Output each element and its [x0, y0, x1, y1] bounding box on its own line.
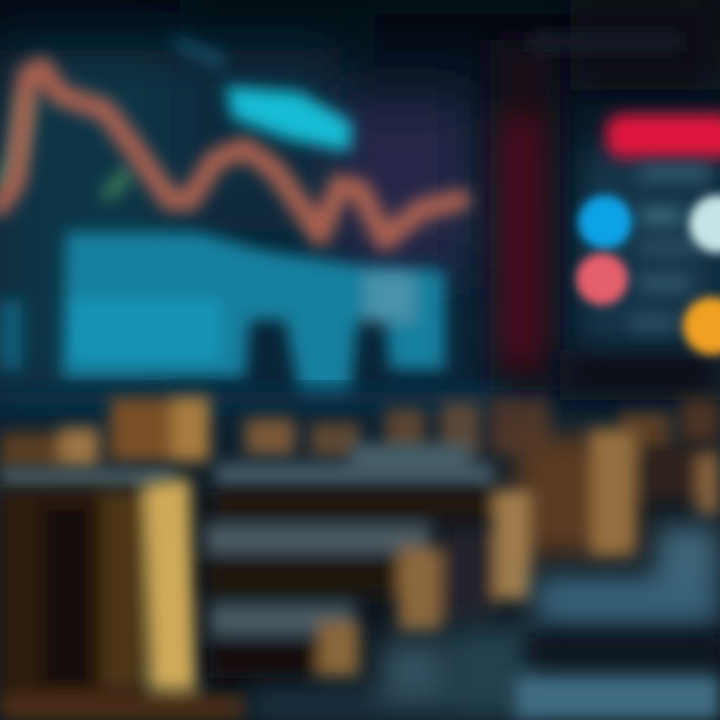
bar block: cyan area chart — [0, 232, 445, 395]
panel: right dashboard — [560, 0, 720, 400]
mid-row tops — [0, 444, 495, 488]
centre wooden stack — [205, 490, 532, 678]
panel: chart screen — [0, 0, 700, 390]
line chart: green trend — [2, 95, 130, 198]
icon: blue circle — [578, 195, 632, 249]
back row of wooden stacks — [0, 396, 720, 470]
icon: white circle — [689, 195, 720, 253]
blue-grey bottom coins — [250, 525, 720, 720]
icon: orange circle — [683, 297, 720, 355]
right wooden stack highlights — [590, 430, 720, 555]
front-left wooden stack — [0, 478, 245, 720]
floor glow under chart — [0, 388, 500, 408]
bottom right bands — [515, 638, 720, 720]
line chart: salmon trend — [0, 68, 460, 240]
right wooden stacks — [515, 435, 635, 555]
panel: dark red column — [490, 40, 560, 390]
cyan callout — [172, 36, 352, 152]
red pill header — [606, 114, 720, 158]
dashboard rows — [630, 165, 710, 331]
icon: salmon circle — [576, 253, 628, 305]
blurred header text — [530, 32, 680, 52]
